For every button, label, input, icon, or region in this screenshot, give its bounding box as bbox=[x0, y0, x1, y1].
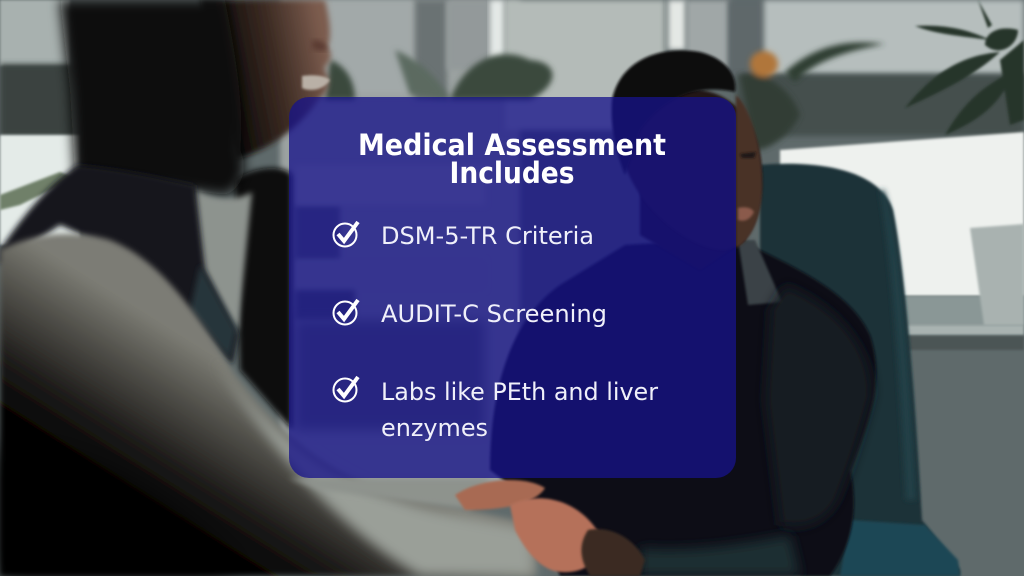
heading: Includes bbox=[450, 156, 574, 190]
woman bbox=[0, 0, 535, 576]
panel: medical assessment card bbox=[289, 97, 736, 478]
sweater body bbox=[0, 234, 535, 576]
panel background bbox=[289, 97, 736, 478]
face bbox=[200, 0, 331, 160]
plant center bbox=[325, 50, 552, 100]
plant right bbox=[905, 0, 1024, 135]
checklist item: Labs like PEth and liver enzymes: Labs like PEth and liver bbox=[381, 378, 658, 406]
window sill bbox=[880, 296, 1024, 326]
checklist item: DSM-5-TR Criteria: DSM-5-TR Criteria bbox=[381, 222, 594, 250]
centre wall area bbox=[280, 0, 520, 500]
chair bbox=[760, 164, 960, 576]
neck and face bbox=[640, 140, 755, 270]
icon: check circle bbox=[334, 222, 358, 246]
heading: Medical Assessment bbox=[358, 128, 666, 162]
icon: check circle bbox=[334, 300, 358, 324]
man bbox=[490, 50, 876, 576]
plant pot bbox=[970, 224, 1024, 325]
hair bbox=[60, 0, 244, 195]
sleeve bbox=[640, 535, 800, 576]
hands bbox=[455, 480, 645, 576]
icon: check circle bbox=[334, 377, 358, 402]
hair bbox=[612, 50, 735, 175]
dark foreground shade bbox=[0, 450, 240, 576]
long hair behind bbox=[235, 168, 292, 430]
bright window right bbox=[780, 132, 1024, 296]
blocks showing through the panel bbox=[295, 205, 340, 260]
heading bbox=[358, 128, 666, 190]
checklist item: Labs like PEth and liver enzymes bbox=[334, 377, 658, 442]
sleeve second arm bbox=[289, 478, 490, 510]
checklist item: Labs like PEth and liver enzymes: enzymes bbox=[381, 414, 488, 442]
turtleneck bbox=[195, 190, 252, 330]
torso bbox=[490, 238, 876, 576]
left window top bbox=[0, 0, 70, 66]
checklist item: AUDIT-C Screening: AUDIT-C Screening bbox=[381, 300, 607, 328]
plant behind man bbox=[740, 42, 885, 150]
vest bbox=[0, 165, 238, 365]
arm highlight bbox=[215, 360, 535, 576]
